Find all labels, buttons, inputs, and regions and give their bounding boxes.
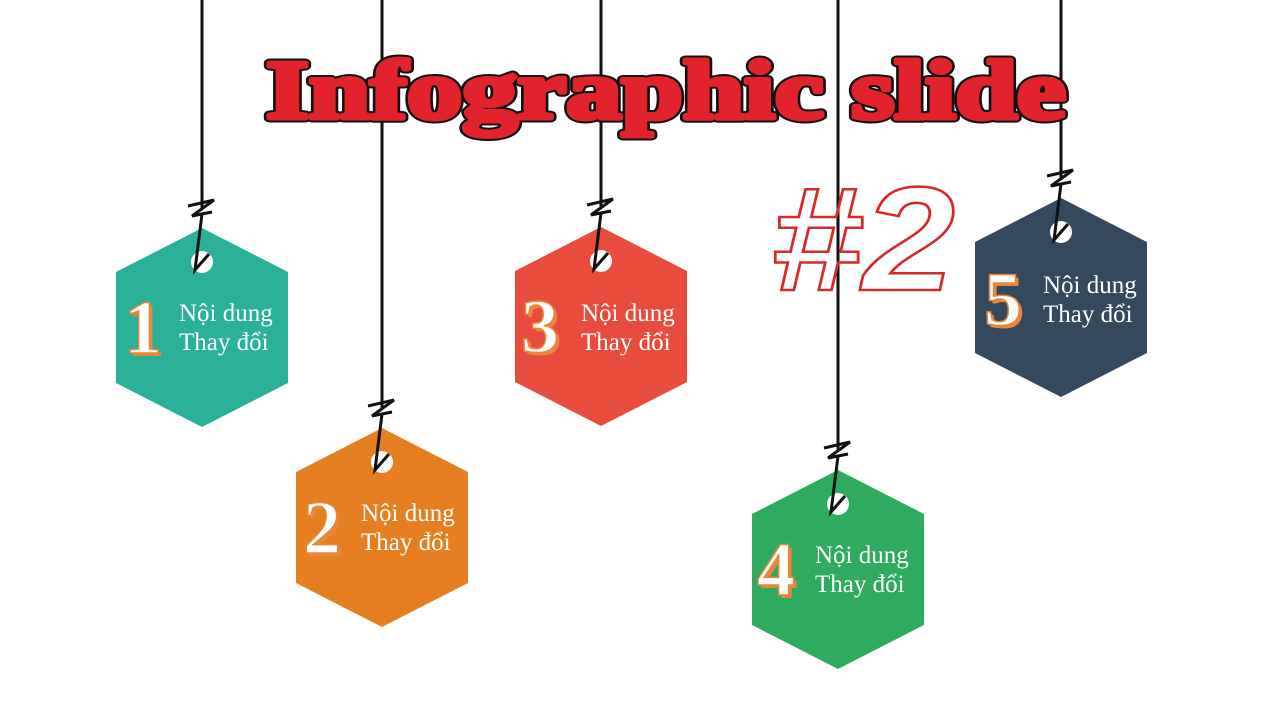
tag 1: 1 bbox=[124, 286, 162, 370]
tag 3: 3 bbox=[521, 285, 559, 369]
tag 1 bbox=[116, 200, 288, 427]
tag 2: Thay đổi bbox=[361, 529, 451, 556]
title: Infographic slide bbox=[266, 44, 1066, 137]
tag 3: Nội dung bbox=[581, 300, 675, 327]
tag 3: Thay đổi bbox=[581, 329, 671, 356]
tag 5: Thay đổi bbox=[1043, 301, 1133, 328]
tag 2: Nội dung bbox=[361, 500, 455, 527]
tag 4: Thay đổi bbox=[815, 571, 905, 598]
tag 2: 2 bbox=[306, 489, 344, 573]
tag 5 bbox=[975, 170, 1147, 397]
tag 2: 2 bbox=[303, 486, 341, 570]
tag 3 bbox=[515, 199, 687, 426]
tag 5: 5 bbox=[984, 258, 1022, 342]
tag 4: 4 bbox=[760, 531, 798, 615]
tag 3: 3 bbox=[524, 288, 562, 372]
tag 4: Nội dung bbox=[815, 542, 909, 569]
tag 4 bbox=[752, 442, 924, 669]
tag 1: 1 bbox=[127, 289, 165, 373]
tag 5: Nội dung bbox=[1043, 272, 1137, 299]
tag 2 bbox=[296, 400, 468, 627]
tag 4: 4 bbox=[757, 528, 795, 612]
string lines bbox=[202, 0, 1061, 450]
title: Infographic slide bbox=[266, 44, 1066, 137]
subtitle #2: #2 bbox=[770, 157, 955, 322]
tag 1: Thay đổi bbox=[179, 329, 269, 356]
tag 1: Nội dung bbox=[179, 300, 273, 327]
tag 5: 5 bbox=[987, 261, 1025, 345]
